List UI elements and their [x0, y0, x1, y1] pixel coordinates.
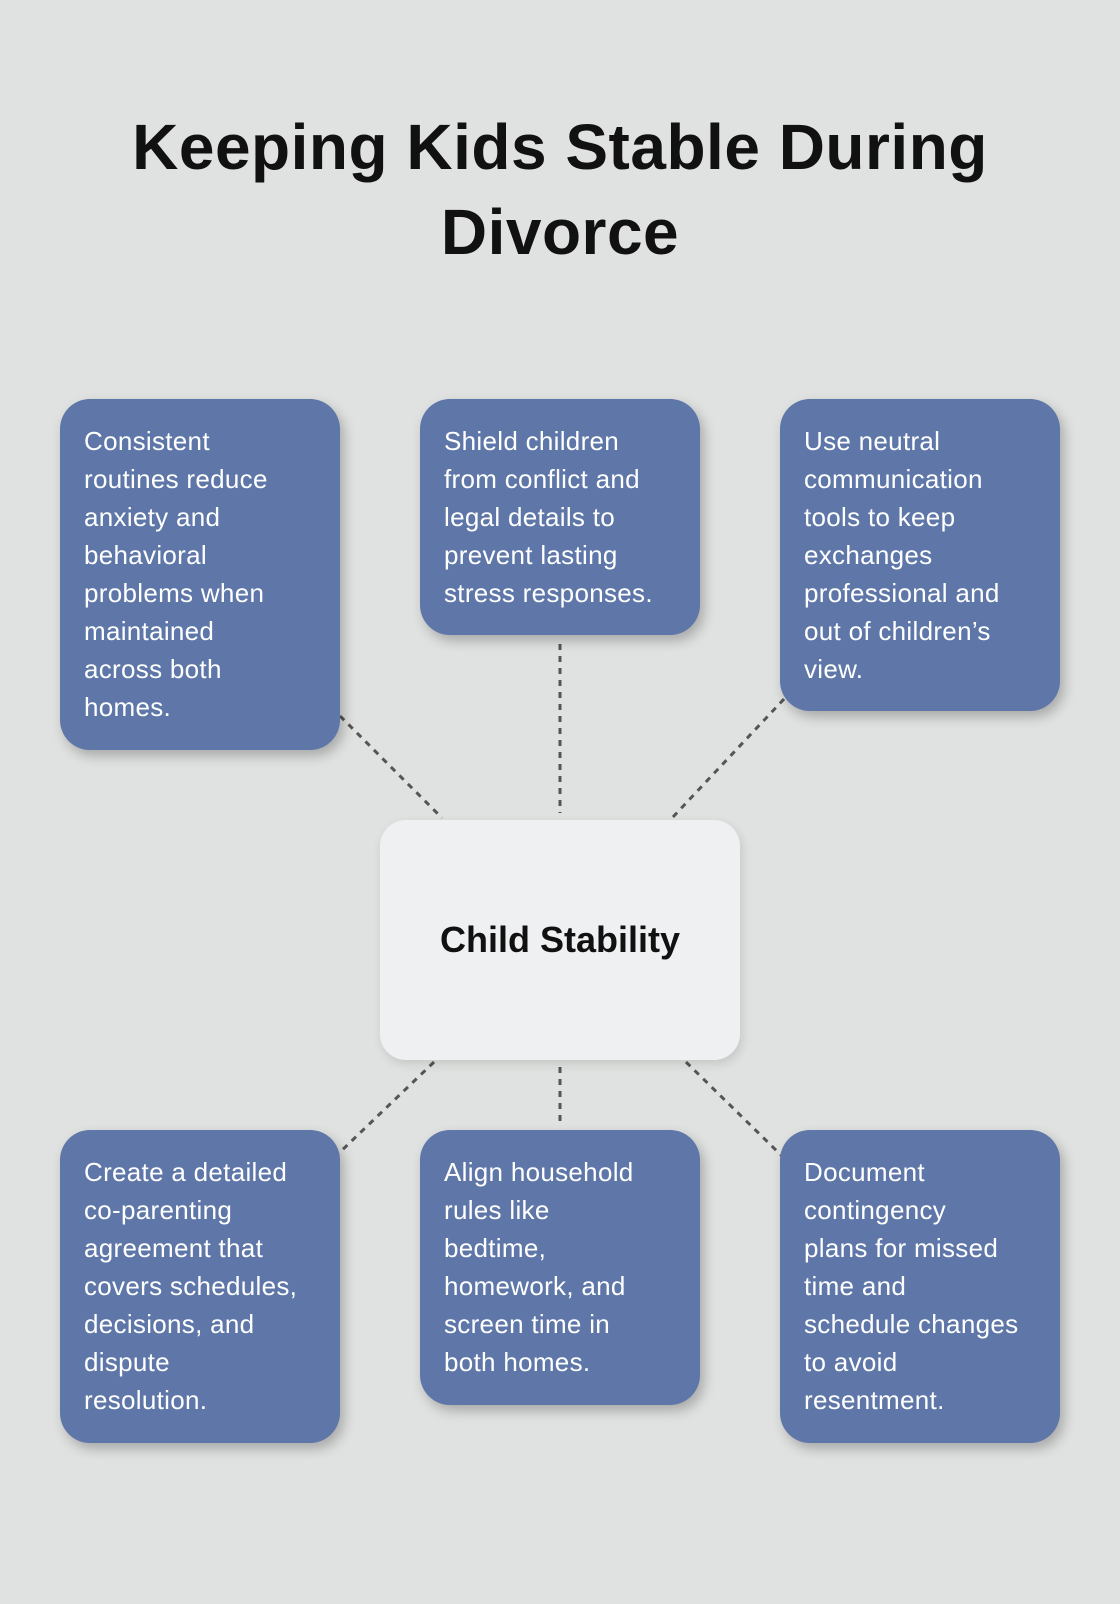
panel: routines: routines reduce [84, 464, 268, 494]
panel: communication: professional and [804, 578, 1000, 608]
title [132, 111, 988, 268]
center: child stability [380, 820, 740, 1060]
panel: contingency: contingency [804, 1195, 946, 1225]
panel: agreement: covers schedules, [84, 1271, 297, 1301]
panel: agreement: co-parenting [84, 1195, 232, 1225]
panel: shield: from conflict and [444, 464, 640, 494]
title: Keeping Kids Stable During [132, 111, 988, 183]
center: child stability: Child Stability [440, 919, 680, 960]
title: Divorce [441, 196, 679, 268]
panel: household rules: rules like [444, 1195, 550, 1225]
panel: agreement: Create a detailed [84, 1157, 287, 1187]
panel: routines: homes. [84, 692, 171, 722]
panel: shield: legal details to [444, 502, 615, 532]
panel: communication: view. [804, 654, 863, 684]
panel: contingency: schedule changes [804, 1309, 1018, 1339]
panel: contingency: time and [804, 1271, 906, 1301]
panel: household rules [420, 1130, 700, 1405]
panel: agreement: resolution. [84, 1385, 207, 1415]
panel: communication: tools to keep [804, 502, 955, 532]
panel: contingency: Document [804, 1157, 925, 1187]
panel: shield: prevent lasting [444, 540, 618, 570]
panel: routines: across both [84, 654, 222, 684]
panel: communication: communication [804, 464, 983, 494]
panel: routines: problems when [84, 578, 264, 608]
panel: communication: Use neutral [804, 426, 940, 456]
panel: communication: out of children’s [804, 616, 991, 646]
panel: agreement: decisions, and [84, 1309, 254, 1339]
panel: household rules: bedtime, [444, 1233, 546, 1263]
panel: routines: maintained [84, 616, 214, 646]
panel: routines [60, 399, 340, 750]
panel: agreement: agreement that [84, 1233, 263, 1263]
panel: household rules: homework, and [444, 1271, 626, 1301]
panel: household rules: both homes. [444, 1347, 590, 1377]
panel: shield: stress responses. [444, 578, 653, 608]
panel: shield [420, 399, 700, 635]
panel: communication [780, 399, 1060, 711]
panel: contingency: resentment. [804, 1385, 945, 1415]
panel: agreement: dispute [84, 1347, 170, 1377]
panel: household rules: screen time in [444, 1309, 610, 1339]
panel: household rules: Align household [444, 1157, 634, 1187]
panel: contingency [780, 1130, 1060, 1443]
panel: contingency: plans for missed [804, 1233, 998, 1263]
panel: contingency: to avoid [804, 1347, 897, 1377]
panel: agreement [60, 1130, 340, 1443]
panel: routines: behavioral [84, 540, 207, 570]
panel: communication: exchanges [804, 540, 932, 570]
panel: routines: anxiety and [84, 502, 220, 532]
panel: routines: Consistent [84, 426, 210, 456]
panel: shield: Shield children [444, 426, 619, 456]
